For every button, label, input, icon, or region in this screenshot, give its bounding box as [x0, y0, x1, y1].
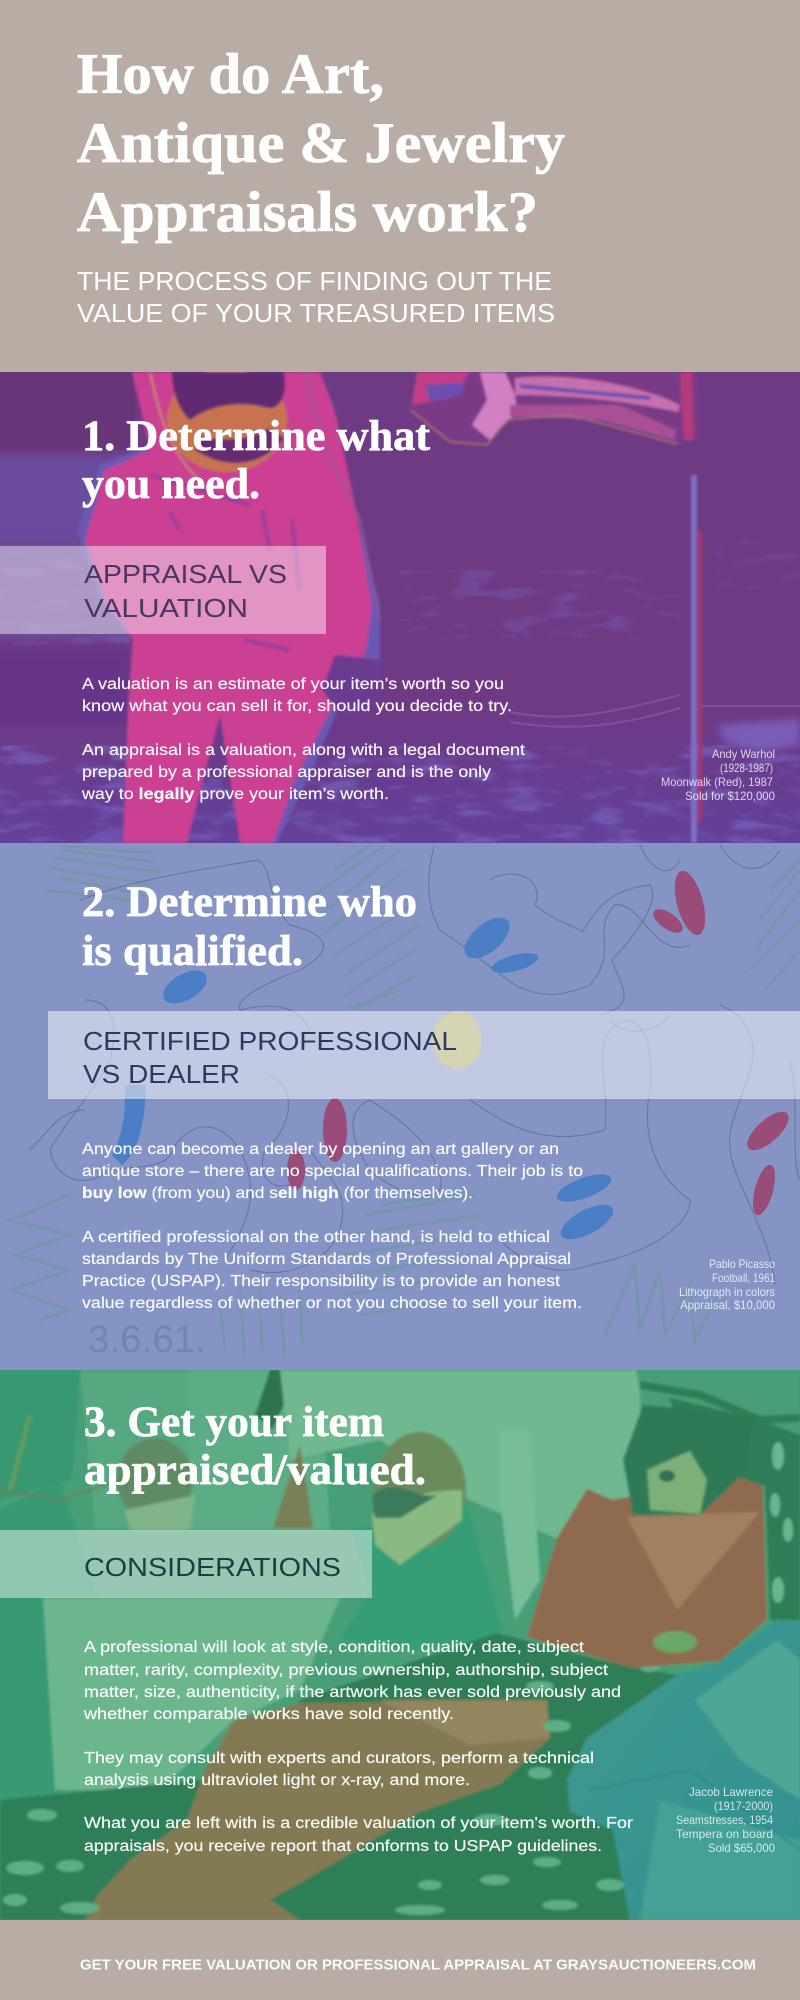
pencil scribbles [30, 845, 800, 1285]
title: Antique & Jewelry [77, 112, 565, 175]
heading: step 1: 1. Determine what [82, 413, 431, 460]
caption: Lawrence: Tempera on board [676, 1827, 773, 1841]
body text: step 3: What you are left with is a credible valuation of your item's worth. For [84, 1815, 634, 1832]
subheading band: certified professional vs dealer: CERTIFIED PROFESSIONAL [83, 1026, 457, 1056]
heading: step 1: you need. [82, 461, 260, 508]
panel: footer call to action [0, 1920, 800, 2000]
body text: step 1: prepared by a professional appraiser and is the only [82, 764, 491, 781]
heading: step 2 [82, 879, 417, 975]
heading: step 3: appraised/valued. [84, 1447, 426, 1494]
body text: step 2: value regardless of whether or not you choose to sell your item. [82, 1295, 582, 1312]
caption: Lawrence: Seamstresses, 1954 [676, 1813, 773, 1827]
body text: step 1: know what you can sell it for, should you decide to try. [82, 698, 512, 715]
body text: step 1 [81, 676, 526, 803]
body text: step 2: antique store – there are no special qualifications. Their job is to [82, 1163, 583, 1180]
body text: step 3: matter, size, authenticity, if the artwork has ever sold previously and [84, 1684, 621, 1701]
body text: step 2: standards by The Uniform Standards of Professional Appraisal [82, 1251, 571, 1268]
green crayon hatching [10, 845, 800, 1360]
paint blobs [112, 868, 795, 1246]
subtitle [77, 266, 555, 328]
body text: step 1: An appraisal is a valuation, along with a legal document [82, 742, 526, 759]
artwork: Picasso football [0, 843, 800, 1370]
panel: header [0, 0, 800, 372]
body text: step 3: whether comparable works have sold recently. [83, 1706, 454, 1723]
caption: Warhol [661, 747, 775, 803]
caption: Lawrence: Sold $65,000 [708, 1841, 775, 1855]
subheading band: appraisal vs valuation: APPRAISAL VS [84, 559, 287, 589]
caption: Warhol: Moonwalk (Red), 1987 [661, 775, 773, 789]
heading: step 1 [82, 413, 431, 508]
body text: step 3: They may consult with experts and curators, perform a technical [84, 1750, 594, 1767]
subheading band: considerations: CONSIDERATIONS [84, 1552, 341, 1582]
panel: step 3 get your item appraised [0, 1370, 800, 1920]
subheading band: appraisal vs valuation: VALUATION [84, 593, 248, 623]
body text: step 3: matter, rarity, complexity, previous ownership, authorship, subject [84, 1662, 609, 1679]
body text: step 1: A valuation is an estimate of your item’s worth so you [82, 676, 504, 693]
title [77, 43, 565, 244]
artwork: Warhol moonwalk [0, 368, 800, 843]
caption: Picasso: Football, 1961 [712, 1271, 775, 1285]
caption: Warhol: Andy Warhol [712, 747, 775, 761]
subheading band: appraisal vs valuation [0, 546, 326, 634]
caption: Picasso [679, 1257, 775, 1312]
title: How do Art, [77, 43, 384, 106]
body text: step 2 [82, 1141, 583, 1312]
skirt [85, 1700, 550, 1920]
subtitle: VALUE OF YOUR TREASURED ITEMS [77, 298, 555, 328]
caption: Picasso: Appraisal, $10,000 [680, 1298, 775, 1312]
caption: Lawrence [676, 1785, 775, 1855]
heading: step 2: 2. Determine who [82, 879, 417, 926]
floor [0, 1633, 677, 1920]
caption: Lawrence: Jacob Lawrence [689, 1785, 773, 1799]
caption: Warhol: Sold for $120,000 [685, 789, 775, 803]
right figure [660, 1370, 800, 1620]
title: Appraisals work? [77, 181, 538, 244]
caption: Picasso: Pablo Picasso [709, 1257, 775, 1271]
subheading band: considerations [0, 1530, 372, 1598]
caption: Picasso: Lithograph in colors [679, 1285, 775, 1299]
subheading band: certified professional vs dealer: VS DEALER [83, 1059, 240, 1089]
artwork: Lawrence seamstresses [0, 1370, 800, 1920]
artwork date inscription: 3.6.61. [88, 1319, 206, 1361]
body text: step 2: A certified professional on the other hand, is held to ethical [82, 1229, 550, 1246]
panel: step 2 determine who is qualified [0, 843, 800, 1370]
heading: step 3 [84, 1399, 426, 1494]
body text: step 3 [83, 1639, 634, 1855]
heading: step 2: is qualified. [82, 928, 303, 975]
subheading band: certified professional vs dealer [48, 1011, 800, 1099]
panel: step 1 determine what you need [0, 372, 800, 843]
body text: step 3: A professional will look at style, condition, quality, date, subject [84, 1639, 585, 1656]
body text: step 2: Practice (USPAP). Their responsibility is to provide an honest [82, 1273, 561, 1290]
subtitle: THE PROCESS OF FINDING OUT THE [77, 266, 552, 296]
dots [3, 1664, 660, 1915]
blue cloth [567, 1619, 800, 1920]
body text: step 3: appraisals, you receive report that conforms to USPAP guidelines. [84, 1838, 602, 1855]
caption: Lawrence: (1917-2000) [714, 1799, 773, 1813]
caption: Warhol: (1928-1987) [720, 761, 773, 775]
heading: step 3: 3. Get your item [84, 1399, 384, 1446]
body text: step 1: way to legally prove your item’s worth. [81, 786, 389, 803]
footer text: GET YOUR FREE VALUATION OR PROFESSIONAL APPRAISAL AT GRAYSAUCTIONEERS.COM [80, 1956, 756, 1974]
body text: step 2: buy low (from you) and s ell high (for themselves). [82, 1185, 473, 1202]
body text: step 3: analysis using ultraviolet light or x-ray, and more. [84, 1772, 470, 1789]
body text: step 2: Anyone can become a dealer by opening an art gallery or an [82, 1141, 559, 1158]
